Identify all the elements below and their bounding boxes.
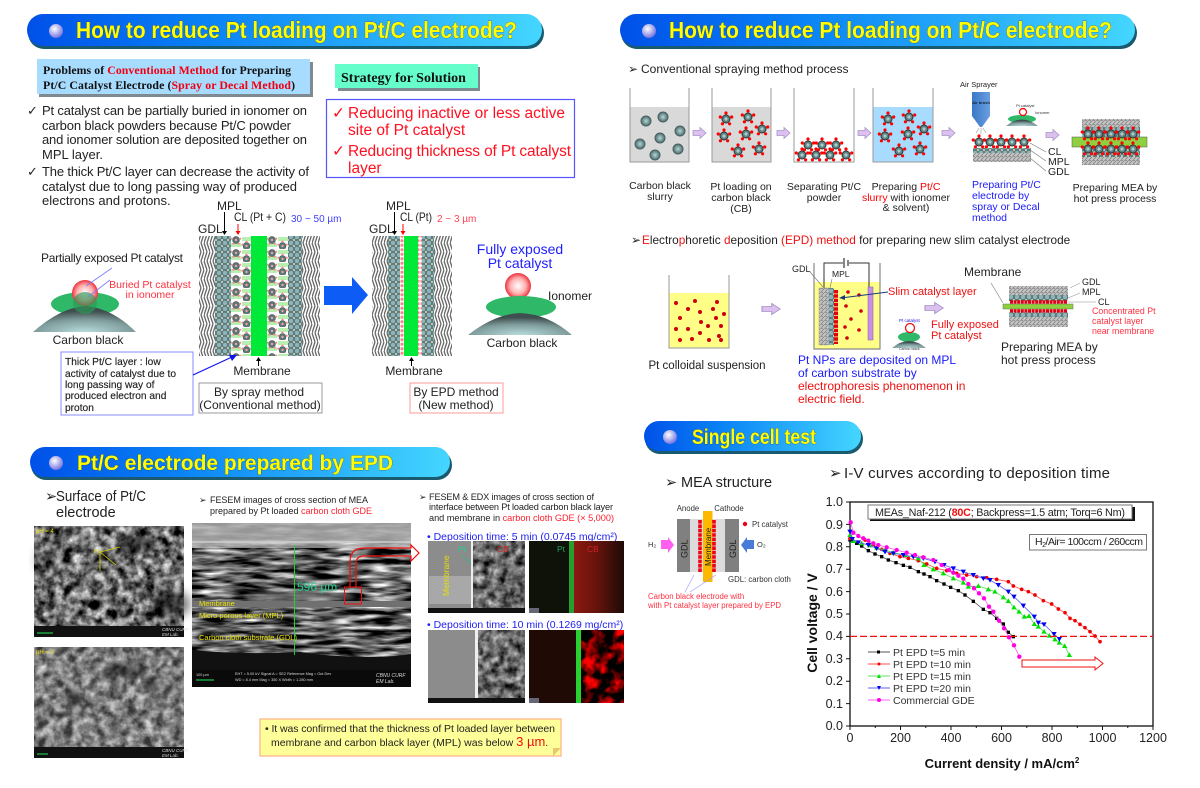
note: gas flow: /Air= 100ccm / 260ccm (1046, 536, 1143, 548)
image: SEM pH 3: EM Lab. (162, 753, 179, 758)
diagram: slim MEA: near membrane (1092, 326, 1154, 336)
diagram: slim MEA: hot press process (1001, 353, 1096, 367)
diagram: partially exposed catalyst: Buried Pt catalyst (109, 279, 191, 291)
diagram: fully exposed catalyst: Ionomer (548, 289, 592, 303)
step: air sprayer electrode (960, 80, 1070, 224)
x axis labels: 400 (941, 731, 961, 745)
heading banner: Pt loading left: How to reduce Pt loading on Pt/C electrode? (76, 17, 517, 43)
text block: FESEM EDX caption: and membrane in carbon cloth GDE (× 5,000) (429, 513, 614, 523)
callout: thick layer (61, 352, 237, 415)
step: air sprayer electrode: GDL (1048, 166, 1070, 178)
label: by EPD method: By EPD method (413, 385, 499, 399)
text block: FESEM EDX caption: interface between Pt loaded carbon black layer (429, 502, 613, 512)
y axis labels: 0.9 (826, 518, 843, 532)
step: separating powder: Separating Pt/C (787, 181, 861, 193)
image: FESEM MEA cross section: WD = 8.4 mm Mag = 350 X Width = 1.280 mm (235, 678, 313, 682)
diagram: partially exposed catalyst: Partially exposed Pt catalyst (41, 251, 184, 265)
diagram: fully exposed catalyst: Fully exposed (477, 241, 563, 257)
label: by spray method (199, 383, 322, 413)
text block: problems list: carbon black powders because Pt/C powder (42, 118, 292, 133)
text block: FESEM EDX caption (419, 492, 614, 523)
image: SEM 10 min (428, 630, 525, 703)
step: separating powder: powder (807, 192, 842, 204)
step: colloidal suspension beaker: Pt colloidal suspension (648, 360, 766, 372)
image: SEM pH 4 (34, 526, 190, 637)
diagram: mini fully exposed catalyst: Fully exposed (931, 319, 999, 331)
panel: strategy list (326, 100, 574, 178)
image: FESEM MEA cross section: EHT = 5.00 kV Signal A = SE2 Reference Mag = Out Dev (235, 672, 331, 676)
step: separating powder (787, 88, 861, 204)
heading: conventional process: Conventional spraying method process (641, 62, 848, 76)
step: Pt loading beaker (710, 88, 772, 215)
step: Pt loading beaker: Pt loading on (710, 181, 772, 193)
y axis labels: 0.0 (826, 719, 843, 733)
callout: thick layer: produced electron and (65, 391, 167, 402)
image: FESEM MEA cross section: Carbon cloth substrate (GDL) (199, 633, 297, 642)
step: Pt loading beaker: carbon black (711, 192, 772, 204)
diagram: slim MEA: Preparing MEA by (1001, 340, 1098, 354)
step: carbon black slurry beaker (629, 88, 692, 203)
label: deposition 10 min: • Deposition time: 10 min (0.1269 mg/cm²) (427, 619, 623, 631)
panel: strategy list: ✓ (332, 143, 345, 160)
note: test conditions: MEAs_Naf-212 (80C; Backpress=1.5 atm; Torq=6 Nm) (875, 507, 1125, 519)
heading banner: Pt loading right: How to reduce Pt loading on Pt/C electrode? (669, 17, 1112, 43)
callout: thick layer: proton (65, 403, 94, 414)
image: FESEM MEA cross section: Membrane (199, 599, 235, 608)
image: FESEM MEA cross section (192, 523, 419, 687)
diagram: MEA structure: GDL (728, 539, 738, 558)
diagram: MEA structure: Carbon black electrode with (648, 592, 744, 601)
heading: MEA structure: MEA structure (681, 475, 772, 491)
image: FESEM MEA cross section: Micro porous layer (MPL) (199, 611, 284, 620)
legend: Pt EPD t=10 min (893, 659, 971, 671)
panel: strategy list: layer (348, 160, 382, 177)
diagram: MEA structure: Cathode (714, 504, 744, 513)
y axis labels: 0.3 (826, 652, 843, 666)
y axis labels (826, 495, 843, 733)
diagram: EPD cell: Slim catalyst layer (888, 286, 977, 298)
step: air sprayer electrode: MPL (1048, 156, 1070, 168)
y axis title: Cell voltage / V (804, 573, 820, 673)
text block: problems list (27, 103, 309, 208)
diagram: slim MEA: MPL (1082, 287, 1101, 297)
diagram: slim MEA: catalyst layer (1092, 316, 1143, 326)
heading banner: Pt/C by EPD (30, 447, 452, 480)
diagram: slim MEA: GDL (1082, 277, 1101, 287)
text block: problems list: electrons and protons. (42, 193, 171, 208)
diagram: EPD electrode cross section: 2 ~ 3 µm (437, 214, 476, 225)
step: carbon black slurry beaker: Carbon black (629, 180, 692, 192)
diagram: EPD electrode cross section (369, 199, 476, 378)
x axis labels (847, 731, 1167, 745)
text block: FESEM MEA caption: prepared by Pt loaded carbon cloth GDE (210, 506, 372, 516)
text block: FESEM EDX caption: FESEM & EDX images of cross section of (429, 492, 594, 502)
y axis labels: 0.8 (826, 540, 843, 554)
diagram: slim MEA: CL (1098, 297, 1110, 307)
step: carbon black slurry beaker: slurry (647, 191, 674, 203)
diagram: MEA structure: Anode (677, 504, 699, 513)
arrow: colloid to cell (762, 304, 780, 314)
diagram: EPD electrode cross section: CL (Pt) (400, 210, 432, 224)
diagram: fully exposed catalyst (468, 241, 592, 350)
text block: EPD description: of carbon substrate by (798, 366, 917, 380)
y axis labels: 1.0 (826, 495, 843, 509)
image: FESEM MEA cross section: EM Lab. (376, 679, 395, 685)
legend: Commercial GDE (893, 695, 975, 707)
diagram: EPD cell: MPL (832, 269, 850, 279)
image: SEM pH 4: pH = 4 (36, 529, 55, 535)
step: air sprayer electrode: electrode by (972, 190, 1030, 202)
step: air sprayer electrode: method (972, 212, 1007, 224)
image: SEM pH 4: Pt (94, 549, 99, 555)
step: MEA hot press: hot press process (1074, 193, 1156, 205)
diagram: EPD electrode cross section: Membrane (385, 364, 443, 378)
diagram: mini fully exposed catalyst: Carbon black (899, 347, 920, 351)
diagram: slim MEA: Membrane (964, 265, 1022, 279)
arrow: spray to EPD (324, 277, 368, 314)
diagram: fully exposed catalyst: Pt catalyst (488, 255, 552, 271)
x axis labels: 1200 (1139, 731, 1167, 745)
y axis labels: 0.1 (826, 697, 843, 711)
legend: Pt EPD t=20 min (893, 683, 971, 695)
legend (868, 647, 975, 707)
diagram: MEA structure: H₂ (648, 540, 656, 549)
diagram: MEA structure (647, 504, 791, 610)
panel: problems heading: Problems of Conventional Method for Preparing (43, 63, 291, 77)
arrow: cell to MEA (925, 302, 943, 314)
step: Pt/C slurry beaker: slurry with ionomer (862, 192, 951, 204)
text block: FESEM MEA caption: FESEM images of cross section of MEA (210, 495, 368, 505)
y axis labels: 0.4 (826, 629, 843, 643)
image: FESEM MEA cross section: 596 µm (297, 580, 337, 594)
text block: FESEM EDX caption: ➢ (419, 492, 427, 502)
label: by spray method: By spray method (214, 385, 304, 399)
heading: surface: ➢ (45, 489, 57, 505)
text block: problems list: ✓ (27, 103, 38, 118)
panel: strategy list: Reducing inactive or less active (348, 105, 565, 122)
arrow: step 2 (777, 128, 790, 138)
note: gas flow: 2 (1042, 542, 1046, 549)
arrow: step 1 (693, 128, 706, 138)
diagram: mini fully exposed catalyst (892, 318, 999, 351)
text block: FESEM MEA caption (199, 495, 372, 516)
diagram: spray electrode cross section: Membrane (233, 364, 291, 378)
heading banner: Pt/C by EPD: Pt/C electrode prepared by EPD (77, 452, 393, 475)
panel: strategy heading: Strategy for Solution (341, 71, 466, 86)
diagram: EPD cell (792, 258, 977, 349)
label: by spray method: (Conventional method) (199, 398, 321, 412)
diagram: spray electrode cross section: 30 ~ 50 µm (291, 214, 342, 225)
callout: thickness conclusion: membrane and carbon black layer (MPL) was below 3 µm. (271, 734, 548, 749)
arrow: performance increase (1022, 657, 1103, 670)
diagram: partially exposed catalyst (33, 251, 191, 347)
panel: strategy heading (335, 64, 480, 91)
heading: conventional process: ➢ (628, 62, 638, 76)
diagram: partially exposed catalyst: Carbon black (53, 333, 124, 347)
x axis title: Current density / mA/cm (925, 756, 1075, 771)
text block: EPD description: electrophoresis phenomenon in (798, 379, 965, 393)
heading banner: Pt loading right (620, 14, 1137, 49)
image: SEM pH 3: pH = 3 (36, 650, 55, 656)
image: EDX 5 min (529, 541, 624, 613)
heading banner: single cell test (644, 421, 863, 454)
step: air sprayer electrode: Pt catalyst (1016, 103, 1035, 108)
image: FESEM MEA cross section: CBNU CURF (376, 673, 406, 679)
image: SEM 5 min: CB (497, 544, 509, 554)
heading: EPD process: E (642, 233, 650, 247)
heading: surface: Surface of Pt/C (56, 489, 146, 505)
step: Pt/C slurry beaker: Preparing Pt/C (872, 181, 941, 193)
step: Pt/C slurry beaker: & solvent) (883, 202, 929, 214)
text block: EPD description: Pt NPs are deposited on MPL (798, 353, 956, 367)
y axis labels: 0.2 (826, 674, 843, 688)
image: SEM 5 min (428, 541, 525, 613)
line chart: IV curves (804, 495, 1167, 771)
image: SEM pH 3: CBNU CURF (162, 748, 189, 753)
panel: problems heading: Pt/C Catalyst Electrode (Spray or Decal Method) (43, 78, 295, 92)
step: air sprayer electrode: Air Sprayer (960, 80, 998, 89)
callout: thickness conclusion (260, 719, 561, 756)
heading: surface: electrode (56, 505, 116, 521)
x axis labels: 600 (991, 731, 1012, 745)
image: EDX 10 min (529, 630, 624, 703)
diagram: partially exposed catalyst: in ionomer (125, 289, 175, 301)
text block: problems list: ✓ (27, 164, 38, 179)
heading: EPD process: lectrophoretic deposition (EPD) method for preparing new slim catalyst electrode (650, 233, 1070, 247)
diagram: EPD electrode cross section: MPL (386, 199, 411, 213)
reference line 0.4 V (850, 635, 1153, 637)
diagram: spray electrode cross section: CL (Pt + C) (234, 210, 286, 224)
note: gas flow (1030, 534, 1146, 550)
step: Pt/C slurry beaker (862, 88, 951, 214)
arrow: step 4 (942, 128, 955, 138)
diagram: spray electrode cross section (198, 199, 342, 378)
diagram: MEA structure: with Pt catalyst layer prepared by EPD (647, 601, 781, 610)
panel: strategy list: site of Pt catalyst (348, 122, 466, 139)
legend: Pt EPD t=5 min (893, 647, 965, 659)
diagram: mini fully exposed catalyst: Pt catalyst (899, 318, 921, 323)
step: air sprayer electrode: spray or Decal (972, 201, 1040, 213)
diagram: spray electrode cross section: MPL (217, 199, 242, 213)
heading: IV curves: ➢ (829, 465, 842, 482)
text block: EPD description: electric field. (798, 392, 865, 406)
data series (850, 522, 1100, 657)
step: air sprayer electrode: Ionomer (1035, 110, 1050, 115)
heading: MEA structure: ➢ (665, 475, 677, 491)
diagram: mini fully exposed catalyst: Pt catalyst (931, 330, 982, 342)
step: air sprayer electrode: CL (1048, 146, 1062, 158)
label: by EPD method: (New method) (418, 398, 494, 412)
heading banner: Pt loading left (27, 14, 544, 49)
step: air sprayer electrode: Air brush (972, 100, 990, 105)
text block: problems list: Pt catalyst can be partially buried in ionomer on (42, 103, 307, 118)
text block: problems list: The thick Pt/C layer can decrease the activity of (42, 164, 309, 179)
x axis title: 2 (1075, 756, 1080, 765)
arrow: step 3 (858, 128, 871, 138)
callout: thick layer: activity of catalyst due to (65, 369, 176, 380)
image: EDX 5 min: Pt (557, 544, 566, 554)
diagram: EPD electrode cross section: GDL (369, 222, 394, 236)
x axis labels: 0 (847, 731, 854, 745)
image: FESEM MEA cross section: 100 µm (196, 673, 209, 677)
x axis labels: 800 (1042, 731, 1062, 745)
diagram: MEA structure: O₂ (757, 540, 766, 549)
heading banner: single cell test: Single cell test (692, 426, 816, 449)
image: SEM 5 min: Membrane (441, 555, 451, 596)
heading: EPD process: ➢ (631, 233, 641, 247)
label: deposition 5 min: • Deposition time: 5 min (0.0745 mg/cm²) (427, 531, 617, 543)
image: SEM pH 4: CBNU CURF (162, 627, 189, 632)
text block: problems list: and ionomer solution are deposited together on (42, 132, 307, 147)
diagram: EPD cell: GDL (792, 264, 811, 274)
step: MEA hot press (1072, 119, 1158, 205)
diagram: slim MEA (964, 265, 1156, 367)
diagram: MEA structure: GDL (680, 539, 690, 558)
x axis labels: 200 (890, 731, 911, 745)
heading: IV curves: I-V curves according to deposition time (844, 465, 1110, 482)
step: Pt loading beaker: (CB) (730, 203, 752, 215)
diagram: slim MEA: Concentrated Pt (1092, 306, 1156, 316)
heading: surface (45, 489, 146, 521)
text block: problems list: MPL layer. (42, 147, 103, 162)
image: SEM pH 4: EM Lab. (162, 632, 179, 637)
legend: Pt EPD t=15 min (893, 671, 971, 683)
arrow: step 5 (1046, 130, 1059, 140)
callout: thick layer: Thick Pt/C layer : low (65, 357, 161, 368)
image: SEM pH 3 (34, 647, 189, 758)
y axis labels: 0.5 (826, 607, 843, 621)
y axis labels: 0.7 (826, 562, 843, 576)
text block: EPD description (798, 353, 965, 406)
x axis labels: 1000 (1089, 731, 1116, 745)
diagram: MEA structure: Pt catalyst (752, 520, 789, 529)
image: SEM 5 min: Pt (458, 544, 467, 554)
diagram: MEA structure: GDL: carbon cloth (728, 575, 791, 584)
image: EDX 5 min: CB (587, 544, 599, 554)
step: air sprayer electrode: Preparing Pt/C (972, 179, 1041, 191)
text block: problems list: catalyst due to long passing way of produced (42, 179, 297, 194)
panel: problems heading (37, 59, 313, 97)
note: gas flow: H (1035, 536, 1043, 548)
callout: thickness conclusion: • It was confirmed that the thickness of Pt loaded layer between (265, 723, 555, 735)
text block: FESEM MEA caption: ➢ (199, 495, 207, 505)
diagram: MEA structure: Membrane (704, 527, 713, 566)
label: by EPD method (410, 383, 503, 413)
step: colloidal suspension beaker (648, 275, 766, 372)
y axis labels: 0.6 (826, 585, 843, 599)
diagram: fully exposed catalyst: Carbon black (487, 336, 558, 350)
panel: strategy list: Reducing thickness of Pt catalyst (348, 143, 572, 160)
callout: thick layer: long passing way of (65, 380, 155, 391)
diagram: spray electrode cross section: GDL (198, 222, 223, 236)
step: MEA hot press: Preparing MEA by (1073, 182, 1158, 194)
panel: strategy list: ✓ (332, 105, 345, 122)
